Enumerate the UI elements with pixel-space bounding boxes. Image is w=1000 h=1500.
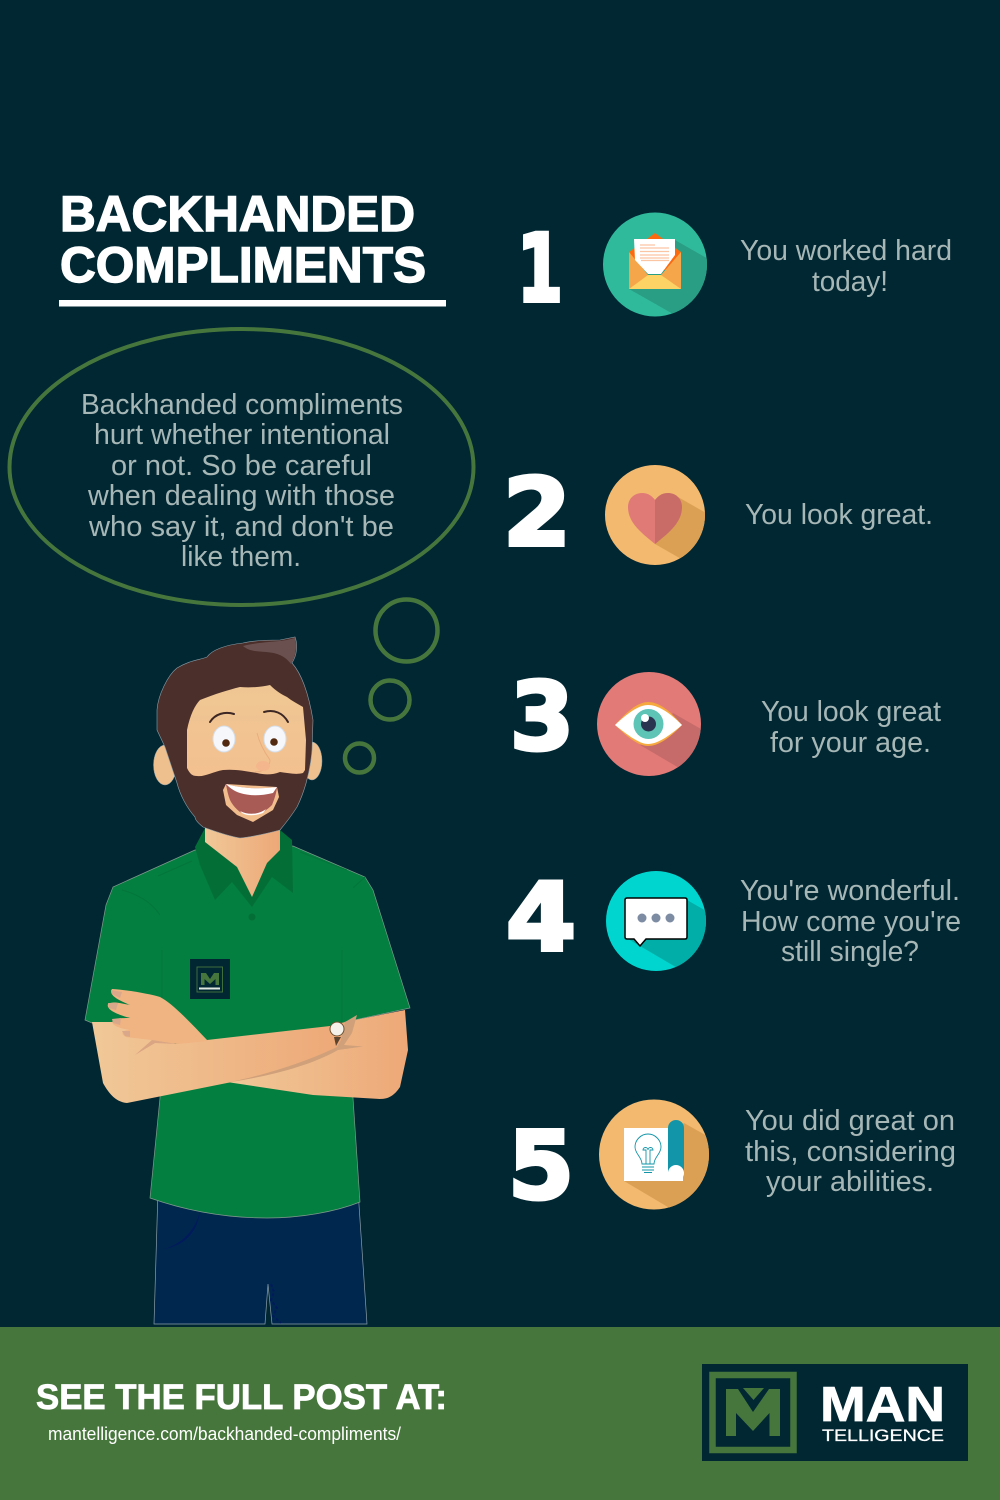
item 5 (513, 1100, 954, 1210)
icon: envelope (603, 212, 707, 316)
shirt badge (190, 959, 230, 999)
text: still single? (781, 936, 919, 968)
mouth (226, 784, 277, 815)
thought bubble with intro text: hurt whether intentional (94, 419, 390, 451)
face (187, 685, 306, 776)
arm crease (230, 1015, 363, 1082)
item 3 (514, 672, 941, 776)
call to action: SEE THE FULL POST AT: (36, 1378, 447, 1417)
hair highlight (243, 638, 296, 664)
trousers (154, 1190, 367, 1324)
icon: speech bubble (606, 871, 706, 971)
left forearm (92, 1022, 345, 1103)
text: You worked hard (740, 235, 952, 267)
number 1: 1 (517, 215, 563, 324)
logo (702, 1364, 968, 1461)
text: You're wonderful. (740, 875, 960, 907)
text: You look great (761, 696, 941, 728)
hand crease (135, 1040, 177, 1055)
text: today! (812, 266, 888, 298)
thought bubble with intro text: or not. So be careful (111, 450, 372, 482)
button (248, 914, 256, 920)
text (740, 235, 952, 298)
wristwatch (330, 1022, 344, 1046)
shirt (85, 846, 410, 1218)
icon: blueprint with light bulb (599, 1100, 709, 1210)
thought bubble circles (345, 600, 438, 772)
thought bubble with intro text (10, 329, 474, 605)
title: BACKHANDED (60, 186, 415, 242)
text: You look great. (745, 499, 933, 531)
item 4 (508, 871, 960, 971)
neck (205, 815, 280, 900)
text (740, 875, 961, 968)
number 3: 3 (510, 663, 574, 772)
item 1 (523, 212, 950, 316)
thought bubble with intro text: like them. (181, 541, 301, 573)
text (745, 1105, 956, 1198)
nose (255, 733, 270, 772)
text: You did great on (745, 1105, 955, 1137)
icon: heart (605, 465, 705, 565)
logo: TELLIGENCE (822, 1426, 944, 1445)
illustrated man with crossed arms (85, 637, 410, 1324)
icon: eye (597, 672, 701, 776)
hair and beard (157, 637, 313, 838)
collar (195, 828, 293, 907)
number 4: 4 (506, 864, 576, 973)
footer banner (0, 1327, 1000, 1500)
url: mantelligence.com/backhanded-compliments/ (48, 1424, 401, 1444)
text (761, 696, 941, 759)
ears (154, 742, 322, 785)
eyes (213, 726, 286, 752)
item 2 (508, 465, 930, 565)
title: COMPLIMENTS (60, 237, 426, 293)
number 5: 5 (508, 1112, 574, 1221)
right upper arm (227, 1010, 408, 1099)
text: your abilities. (766, 1166, 934, 1198)
text: How come you're (741, 906, 961, 938)
text: for your age. (770, 727, 931, 759)
thought bubble with intro text: Backhanded compliments (81, 389, 403, 421)
title (59, 186, 446, 306)
eyebrows (210, 711, 288, 722)
far hand (108, 989, 208, 1044)
thought bubble with intro text: when dealing with those (87, 480, 395, 512)
mouth skin patch (223, 784, 279, 822)
logo: MAN (820, 1378, 945, 1432)
text: this, considering (745, 1136, 956, 1168)
thought bubble with intro text: who say it, and don't be (88, 511, 394, 543)
number 2: 2 (503, 459, 571, 568)
